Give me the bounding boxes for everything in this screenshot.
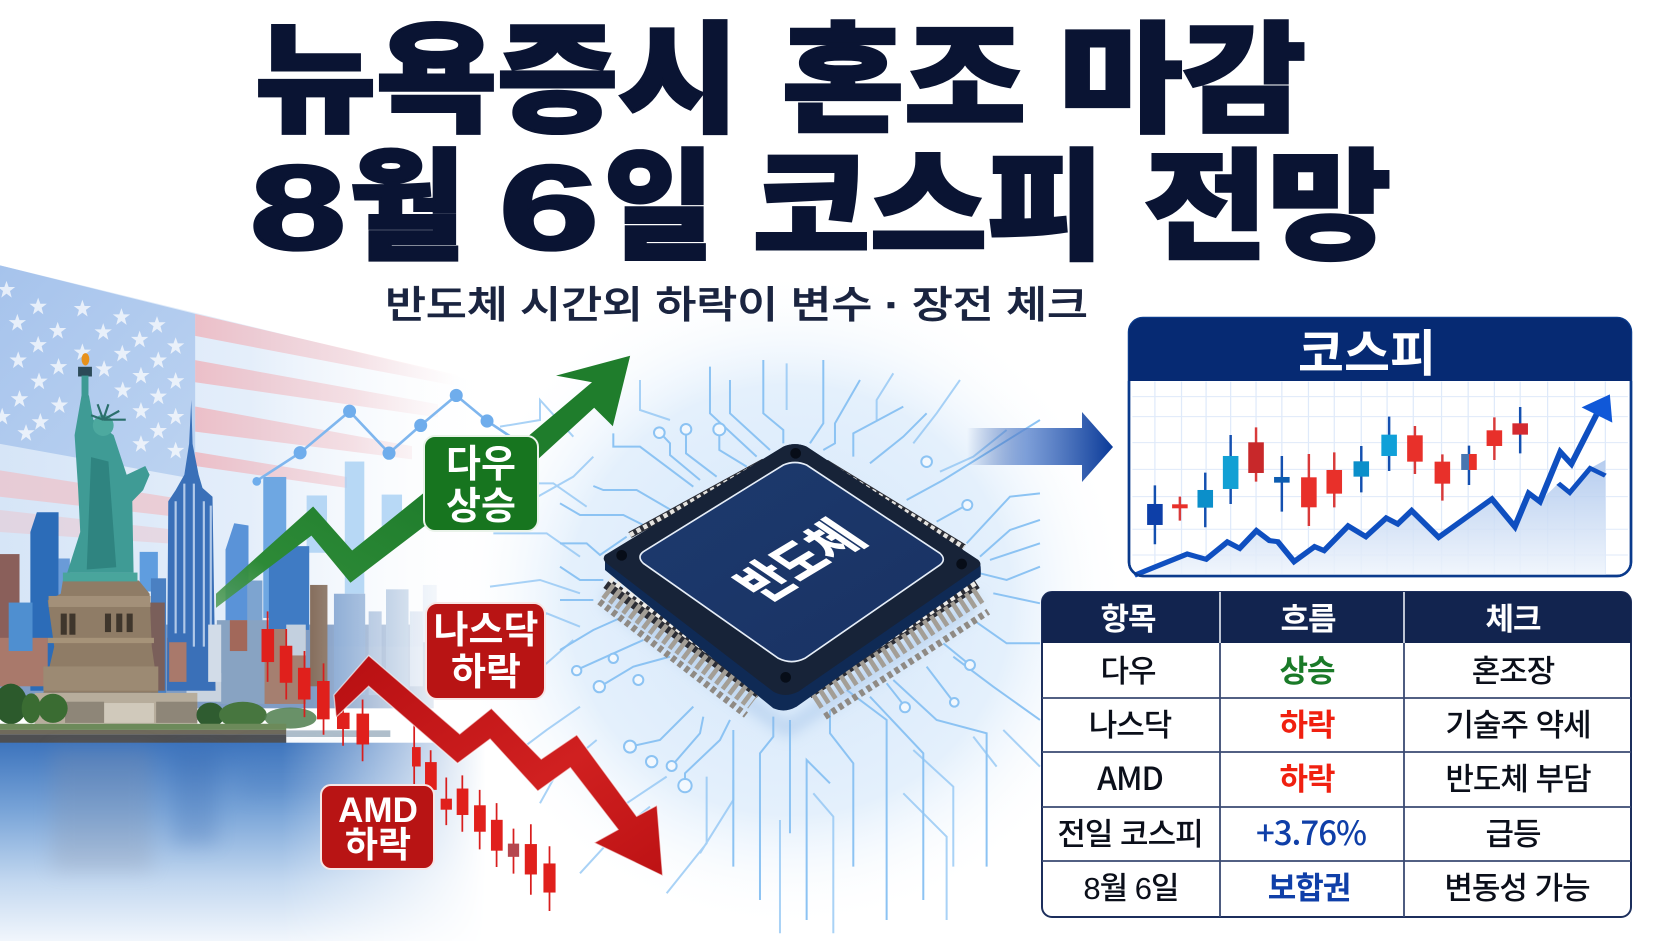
title line one: 마감	[1059, 14, 1306, 148]
grid lines	[1132, 382, 1628, 575]
row: AMD: 반도체 부담	[1445, 762, 1591, 797]
panel: summary table	[1042, 592, 1631, 917]
title line one: 혼조	[782, 14, 1026, 148]
panel: KOSPI chart	[1129, 318, 1631, 576]
arrow: green rising	[216, 356, 630, 608]
title line two: 6	[499, 141, 599, 275]
title line two	[250, 141, 1391, 275]
row: Nasdaq: 나스닥	[1089, 708, 1172, 743]
title line one: 뉴욕증시	[255, 14, 739, 148]
table grid	[1042, 643, 1631, 917]
header labels: 항목	[1100, 602, 1156, 637]
panel header	[1129, 318, 1631, 381]
subtitle: 반도체 시간외 하락이 변수 · 장전 체크	[385, 285, 1088, 327]
small blue line chart	[252, 389, 510, 486]
arrow: red falling	[334, 655, 663, 876]
row: August 6: 변동성 가능	[1444, 871, 1590, 906]
row: previous KOSPI: +3.76%	[1256, 807, 1366, 855]
label: Nasdaq down: 하락	[451, 652, 521, 694]
statue of liberty	[43, 353, 158, 693]
red candles	[262, 611, 556, 911]
title line one	[255, 14, 1306, 148]
chip label: 반도체	[723, 513, 878, 610]
american flag backdrop	[0, 265, 499, 647]
row: Dow	[1100, 654, 1555, 689]
row: Nasdaq	[1089, 708, 1591, 743]
row: previous KOSPI: 전일 코스피	[1057, 817, 1203, 852]
header labels	[1100, 602, 1541, 637]
arrow: chip to KOSPI	[967, 412, 1113, 482]
row: AMD: AMD	[1097, 754, 1163, 800]
label: AMD down: 하락	[345, 824, 411, 865]
row: AMD: 하락	[1279, 762, 1335, 797]
background glow behind chip	[450, 270, 1130, 930]
header labels: 흐름	[1280, 602, 1336, 637]
chip pins	[599, 462, 988, 717]
row: August 6	[1083, 871, 1590, 906]
title line two: 월	[349, 141, 465, 275]
area under line	[1134, 460, 1605, 575]
row: previous KOSPI: 급등	[1485, 817, 1541, 852]
title line two: 일	[604, 141, 714, 275]
scene: New York skyline and flag	[0, 265, 564, 941]
circuit traces around chip	[490, 360, 1040, 933]
title line two: 코스피	[753, 141, 1104, 275]
empire state building	[167, 400, 221, 691]
frame edge redraw	[1129, 381, 1631, 576]
row: previous KOSPI	[1057, 807, 1541, 855]
label: AMD down	[321, 785, 434, 869]
row: AMD	[1097, 754, 1591, 800]
chip shadow	[603, 587, 980, 737]
title	[250, 14, 1391, 275]
row: Dow: 다우	[1100, 654, 1156, 689]
chip package body	[605, 444, 981, 710]
title line two: 8	[250, 141, 346, 275]
row: Dow: 혼조장	[1472, 654, 1555, 689]
row: August 6: 8월 6일	[1083, 871, 1179, 906]
KOSPI rising line	[1134, 394, 1612, 575]
row: Nasdaq: 하락	[1279, 708, 1335, 743]
label: Dow up: 다우	[446, 444, 516, 486]
candlesticks	[1147, 407, 1528, 544]
label: Nasdaq down: 나스닥	[434, 610, 538, 652]
island trees and waterfront	[0, 684, 390, 743]
chip top plate	[640, 462, 943, 662]
title line two: 전망	[1144, 141, 1391, 275]
label: Dow up	[424, 436, 538, 531]
skyline buildings	[0, 477, 437, 708]
chip mounting holes	[616, 448, 967, 683]
label: Nasdaq down	[426, 603, 545, 699]
table header row	[1042, 592, 1631, 643]
river water	[0, 740, 477, 941]
row: Dow: 상승	[1279, 654, 1335, 689]
table frame	[1042, 592, 1631, 917]
row: Nasdaq: 기술주 약세	[1445, 708, 1591, 743]
label: AMD down: AMD	[338, 791, 418, 830]
label: Dow up: 상승	[446, 486, 516, 528]
icon: semiconductor chip	[599, 444, 988, 737]
row: August 6: 보합권	[1268, 871, 1350, 906]
panel frame	[1129, 318, 1631, 576]
pale bars	[307, 462, 402, 594]
panel title: 코스피	[1298, 326, 1436, 382]
header labels: 체크	[1485, 602, 1541, 637]
